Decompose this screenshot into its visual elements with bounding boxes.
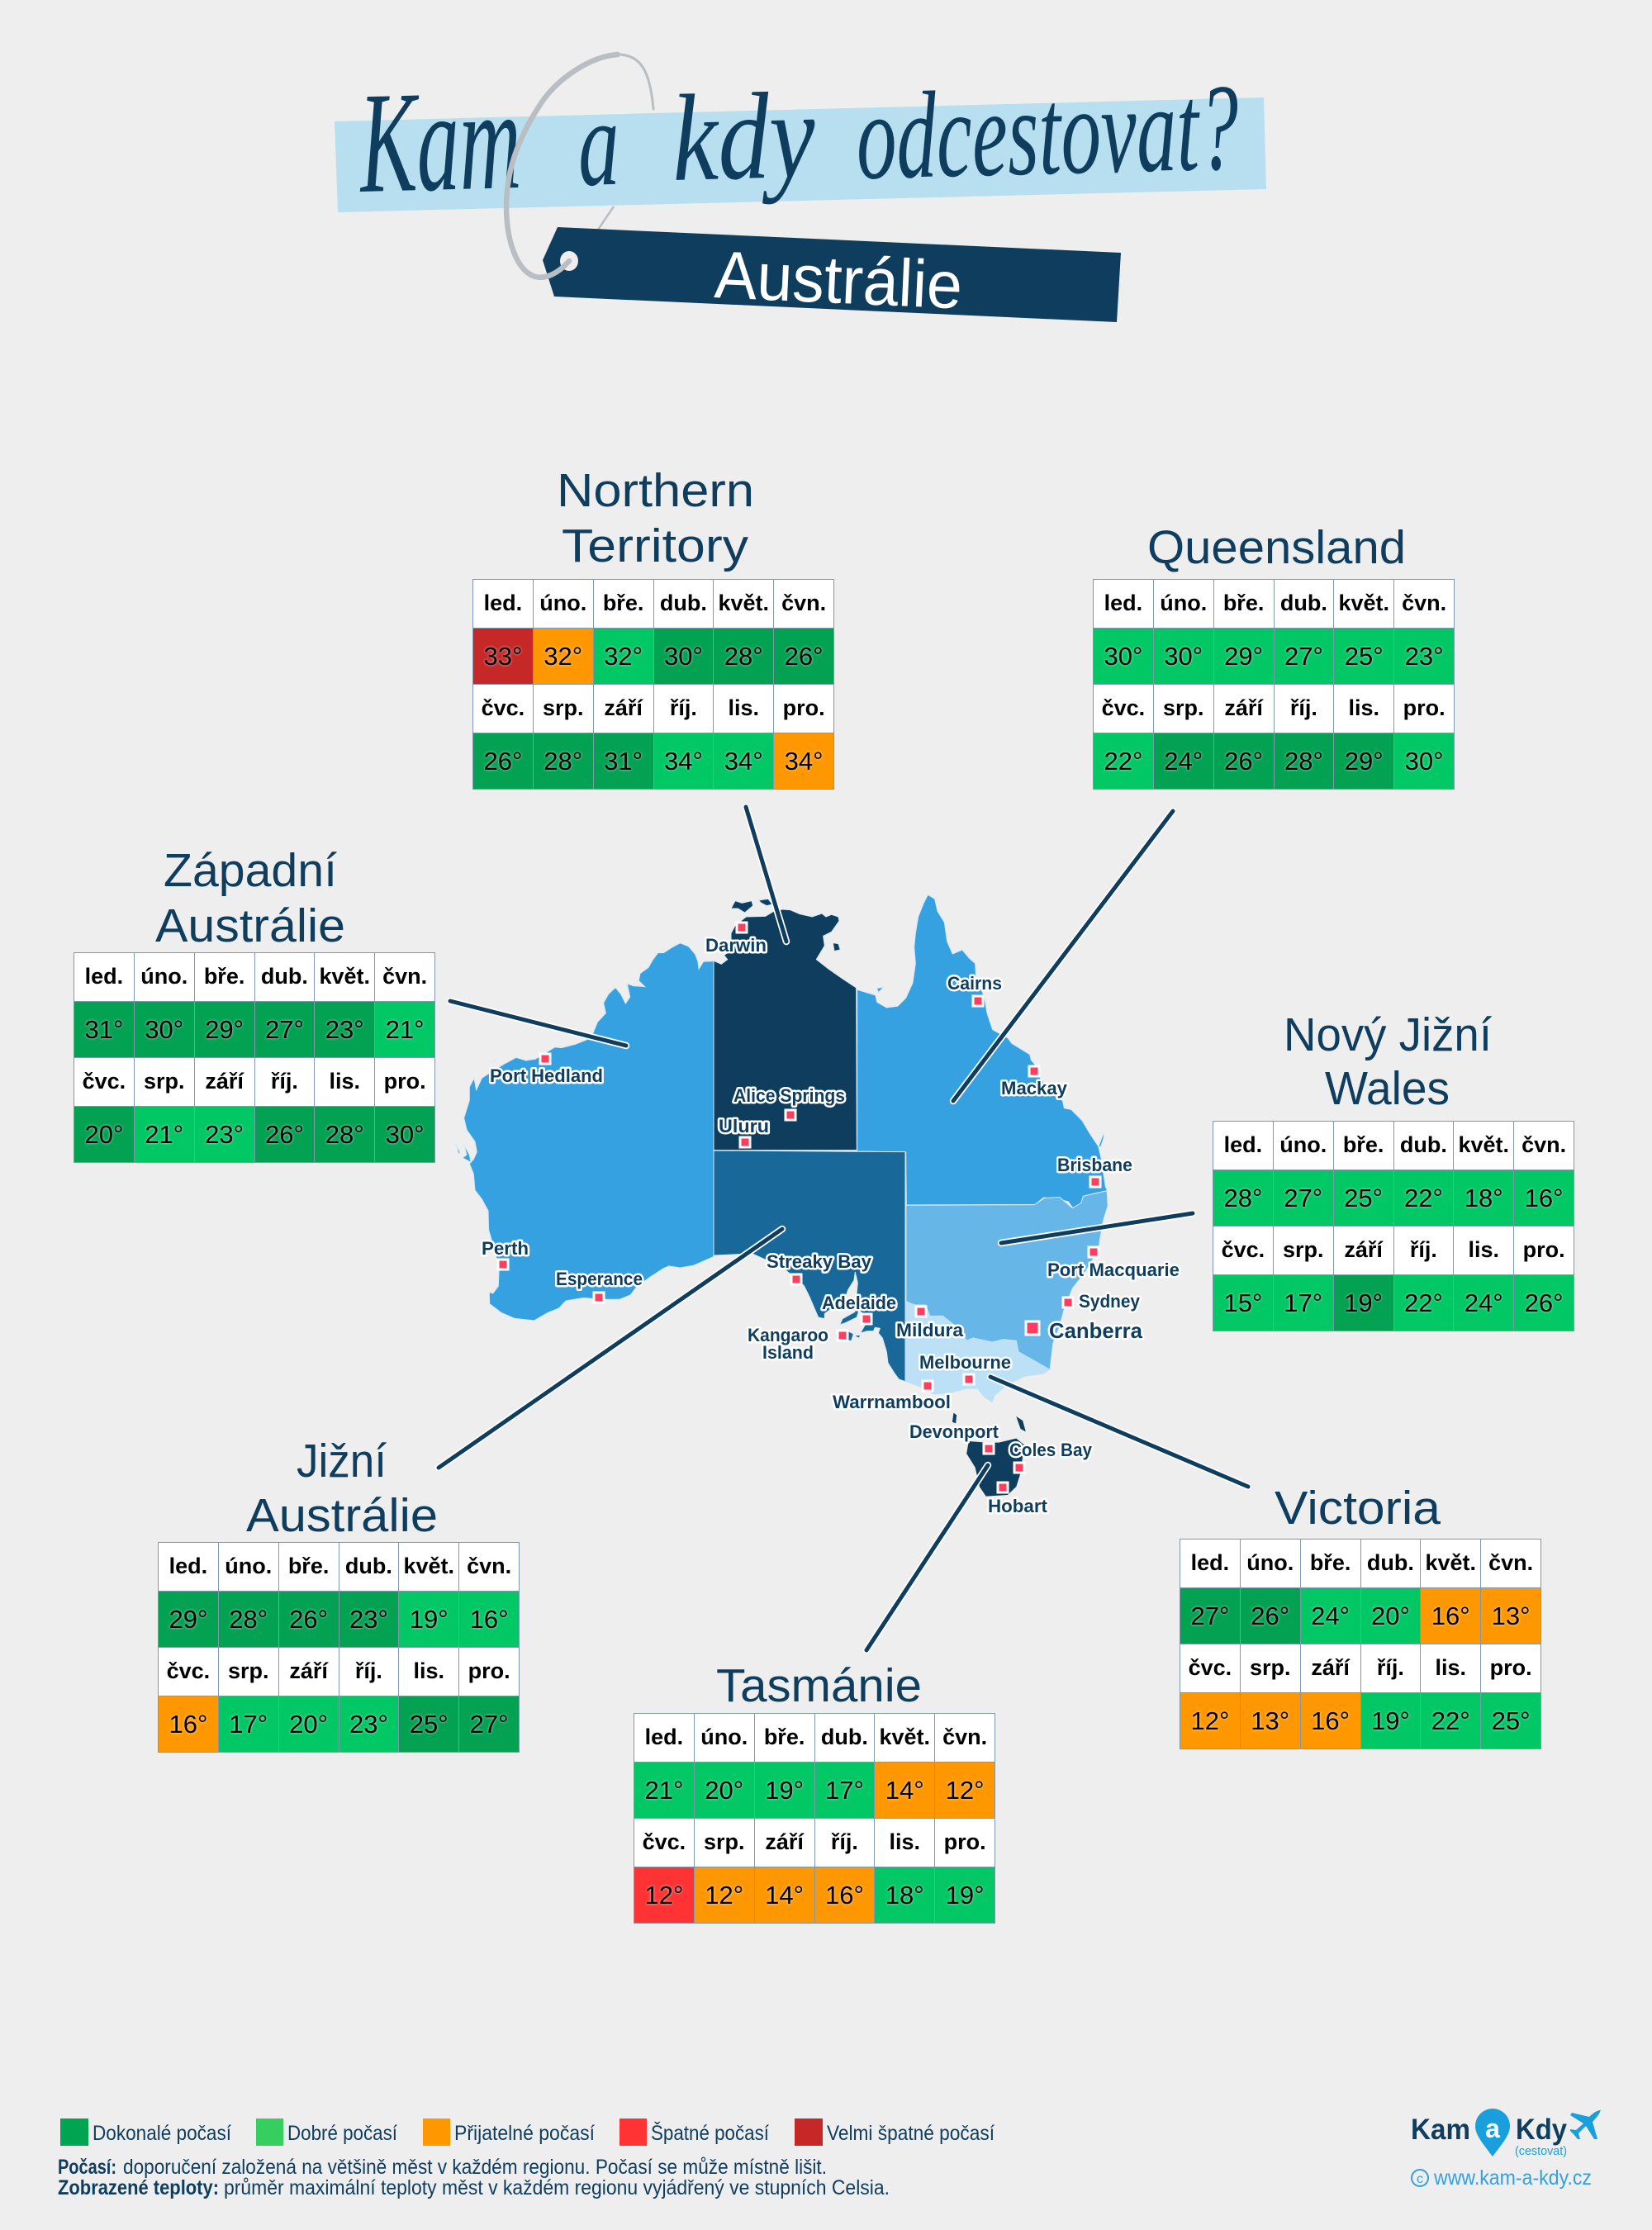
table: Jižní Austrálie: 25° [410,1710,449,1738]
city: Alice Springs [733,1085,845,1120]
table: Northern Territory [472,579,834,790]
table: Nový Jižní Wales: 17° [1284,1288,1322,1317]
table: Northern Territory: 32° [604,641,643,671]
table: Northern Territory: 26° [785,641,824,671]
table: Jižní Austrálie: 20° [289,1710,328,1738]
table: Západní Austrálie: čvn. [382,963,427,988]
tag string back [598,206,614,230]
note: temperatures: Zobrazené teploty: [58,2176,219,2199]
city: Coles Bay: Coles Bay [1009,1440,1093,1460]
legend: bad weather: Špatné počasí [651,2121,769,2145]
table: Tasmánie: 17° [825,1776,864,1804]
city: Hobart [988,1483,1048,1516]
title banner [335,97,1266,212]
table: Jižní Austrálie: čvc. [167,1658,210,1683]
heading: Nový Jižní Wales: Nový Jižní [1284,1008,1492,1061]
heading: Northern Territory: Territory [562,520,749,572]
region: Northern Territory [714,899,857,1151]
tag string loop [506,55,653,278]
table: Západní Austrálie: čvc. [83,1069,126,1094]
table: Nový Jižní Wales: 28° [1223,1183,1262,1212]
table: Jižní Austrálie: 23° [349,1604,388,1634]
table: Nový Jižní Wales: úno. [1279,1132,1327,1156]
table: Nový Jižní Wales: 18° [1464,1183,1503,1212]
website link: www.kam-a-kdy.cz [1433,2166,1592,2190]
table: Victoria: led. [1191,1549,1229,1574]
legend: bad weather [620,2118,769,2146]
table: Northern Territory: pro. [783,695,825,720]
table: Queensland: 30° [1405,747,1444,775]
icon: plane [1570,2110,1601,2139]
table: Victoria [1180,1539,1541,1749]
table: Northern Territory: čvc. [482,695,525,720]
subtitle: Austrálie [713,238,964,324]
table: Západní Austrálie: 29° [205,1014,244,1044]
table: Jižní Austrálie: 27° [470,1710,509,1738]
city: Streaky Bay [767,1251,872,1284]
table: Tasmánie: 14° [885,1776,924,1804]
table: Queensland: čvn. [1402,590,1446,614]
city: Devonport: Devonport [909,1421,999,1442]
subtitle tag [543,227,1121,322]
region: Tasmania [952,1413,1026,1497]
table: Jižní Austrálie: říj. [355,1658,382,1683]
table: Jižní Austrálie: 16° [470,1604,509,1634]
table: Queensland: 23° [1405,641,1444,671]
map of Australia [456,894,1108,1497]
table: Queensland: květ. [1338,590,1389,614]
table: Queensland: 28° [1284,747,1323,775]
table: Západní Austrálie: 30° [386,1120,425,1148]
table: Západní Austrálie: 20° [84,1120,123,1148]
table: Tasmánie: 19° [765,1776,804,1804]
table: Jižní Austrálie: srp. [228,1658,269,1683]
city: Streaky Bay: Streaky Bay [767,1251,872,1272]
table: Západní Austrálie: 31° [84,1014,123,1044]
city: Warrnambool: Warrnambool [833,1392,951,1412]
table: Victoria: 25° [1492,1706,1531,1734]
city: Devonport [909,1421,999,1454]
table: Queensland: září [1224,695,1263,720]
title: Kam [356,59,523,223]
table: Tasmánie: úno. [700,1725,748,1749]
table: Northern Territory: květ. [718,590,769,614]
table: Západní Austrálie: srp. [144,1069,185,1094]
table: Jižní Austrálie: led. [169,1553,207,1578]
city: Port Hedland [490,1054,603,1086]
table: Tasmánie: dub. [821,1725,868,1749]
table: Queensland [1093,579,1455,790]
logo [1411,2109,1601,2158]
table: Queensland: lis. [1348,695,1379,720]
table: Northern Territory: lis. [728,695,759,720]
note: weather: Počasí: [58,2156,116,2179]
table: Victoria: pro. [1490,1655,1532,1680]
table: Northern Territory: led. [484,590,522,614]
table: Tasmánie: 12° [644,1880,683,1910]
legend: perfect weather [60,2118,231,2146]
table: Victoria: 24° [1311,1601,1350,1630]
table: Tasmánie: bře. [764,1725,805,1749]
table: Victoria: 22° [1431,1706,1470,1734]
website link: c [1417,2172,1423,2186]
table: Northern Territory: 26° [483,747,522,775]
table: Západní Austrálie: pro. [384,1069,426,1094]
table: Northern Territory: úno. [539,590,586,614]
table: Queensland: pro. [1403,695,1446,720]
city: Mildura [896,1307,964,1340]
table: Nový Jižní Wales: pro. [1523,1237,1565,1262]
table: Queensland: 30° [1164,641,1203,671]
table: Nový Jižní Wales: 16° [1525,1183,1564,1212]
city: Sydney: Sydney [1079,1291,1141,1312]
table: Tasmánie: 21° [644,1776,683,1804]
table: Západní Austrálie: lis. [329,1069,360,1094]
table: Jižní Austrálie: pro. [468,1658,510,1683]
leader line: Queensland [953,811,1173,1101]
table: Queensland: 27° [1284,641,1323,671]
table: Queensland: 25° [1345,641,1384,671]
table: Tasmánie: říj. [831,1829,858,1853]
table: Tasmánie: září [765,1829,804,1853]
table: Západní Austrálie: 21° [386,1014,425,1044]
table: Tasmánie: květ. [879,1725,930,1749]
table: Northern Territory: 34° [724,747,763,775]
icon: location pin [1475,2109,1510,2156]
table: Victoria: 19° [1371,1706,1410,1734]
city: Coles Bay [1009,1440,1093,1473]
city: Cairns: Cairns [947,973,1002,994]
city: Darwin [705,923,767,956]
table: Northern Territory: 28° [544,747,582,775]
table: Jižní Austrálie: lis. [413,1658,444,1683]
city: Mackay: Mackay [1001,1078,1068,1098]
table: Západní Austrálie: bře. [204,963,244,988]
table: Nový Jižní Wales [1213,1121,1574,1331]
table: Queensland: 29° [1224,641,1263,671]
city: Adelaide: Adelaide [822,1293,896,1313]
table: Tasmánie: led. [645,1725,683,1749]
table: Nový Jižní Wales: 27° [1284,1183,1322,1212]
leader line: South Australia [439,1229,782,1468]
table: Nový Jižní Wales: čvn. [1521,1132,1566,1156]
city: Alice Springs: Alice Springs [733,1085,845,1106]
legend: good weather [256,2118,397,2146]
table: Západní Austrálie: led. [85,963,123,988]
logo: a [1485,2114,1500,2143]
table: Nový Jižní Wales: 22° [1404,1288,1443,1317]
table: Victoria: čvn. [1488,1549,1533,1574]
table: Queensland: led. [1104,590,1142,614]
table: Northern Territory: 28° [724,641,763,671]
table: Nový Jižní Wales: září [1344,1237,1383,1262]
table: Tasmánie: čvn. [942,1725,987,1749]
city: Brisbane [1057,1155,1132,1187]
title [356,59,1241,223]
title: a [577,74,621,212]
city: Adelaide [822,1293,896,1324]
city: Esperance [556,1269,643,1302]
legend: good weather: Dobré počasí [287,2122,397,2145]
region: Victoria [905,1302,1050,1402]
leader line: Northern Territory [746,807,786,942]
table: Nový Jižní Wales: dub. [1400,1132,1447,1156]
table: Northern Territory: dub. [660,590,707,614]
table: Northern Territory: čvn. [781,590,826,614]
heading: Northern Territory: Northern [557,464,754,517]
table: Victoria: lis. [1435,1655,1466,1680]
leader line: Western Australia [450,1001,626,1046]
table: Tasmánie: lis. [889,1829,920,1853]
legend: acceptable weather: Přijatelné počasí [454,2122,595,2145]
legend: acceptable weather [423,2118,595,2146]
table: Nový Jižní Wales: 15° [1223,1288,1262,1317]
table: Západní Austrálie: květ. [319,963,370,988]
title: kdy [671,67,817,207]
region: South Australia [714,1151,905,1382]
table: Queensland: dub. [1280,590,1327,614]
legend: very bad weather: Velmi špatné počasí [827,2122,995,2145]
legend: perfect weather: Dokonalé počasí [93,2122,231,2145]
table: Jižní Austrálie: 29° [169,1604,207,1634]
city: Warrnambool [833,1381,951,1412]
table: Jižní Austrálie: úno. [225,1553,272,1578]
table: Západní Austrálie: 26° [265,1120,304,1148]
table: Tasmánie: 16° [825,1880,864,1910]
table: Nový Jižní Wales: led. [1224,1132,1262,1156]
table: Queensland: říj. [1290,695,1317,720]
table: Nový Jižní Wales: čvc. [1222,1237,1265,1262]
heading: Jižní Austrálie [246,1435,438,1542]
logo: Kam [1411,2114,1470,2146]
table: Northern Territory: 33° [483,641,522,671]
table: Nový Jižní Wales: srp. [1283,1237,1323,1262]
leader line: Tasmania [866,1465,988,1650]
city: Port Macquarie [1047,1247,1180,1280]
table: Nový Jižní Wales: 25° [1344,1183,1383,1212]
table: Jižní Austrálie: září [289,1658,328,1683]
table: Západní Austrálie [74,952,435,1163]
table: Queensland: 24° [1164,747,1203,775]
table: Northern Territory: 34° [664,747,703,775]
note: temperatures: průměr maximální teploty měst v každém regionu vyjádřený ve stupních Celsia. [224,2176,890,2199]
leader line: New South Wales [1001,1213,1193,1243]
table: Jižní Austrálie [158,1542,520,1753]
city: Brisbane: Brisbane [1057,1155,1132,1175]
table: Victoria: 16° [1431,1601,1470,1630]
heading: Queensland: Queensland [1147,521,1406,574]
table: Západní Austrálie: 23° [205,1120,244,1148]
table: Victoria: čvc. [1189,1655,1232,1680]
table: Victoria: říj. [1377,1655,1404,1680]
city: Perth: Perth [482,1238,529,1259]
city: Melbourne: Melbourne [919,1352,1011,1373]
heading: Nový Jižní Wales [1284,1008,1492,1115]
city: Kangaroo Island: Kangaroo [748,1325,828,1345]
title: odcestovat? [855,59,1241,206]
table: Západní Austrálie: úno. [140,963,188,988]
city: Kangaroo Island: Island [762,1342,814,1363]
table: Tasmánie: 20° [705,1776,743,1804]
city: Port Hedland: Port Hedland [490,1065,603,1086]
table: Northern Territory: 32° [544,641,582,671]
table: Victoria: 26° [1251,1601,1289,1630]
city: Hobart: Hobart [988,1496,1048,1516]
heading: Northern Territory [557,464,754,572]
table: Northern Territory: říj. [670,695,697,720]
table: Jižní Austrálie: bře. [288,1553,329,1578]
heading: Západní Austrálie: Austrálie [155,899,345,952]
tag hole [560,251,578,271]
table: Victoria: 13° [1492,1601,1531,1630]
table: Tasmánie: 14° [765,1880,804,1910]
table: Tasmánie: 19° [946,1880,985,1910]
table: Tasmánie: pro. [944,1829,986,1853]
table: Jižní Austrálie: dub. [345,1553,392,1578]
heading: Západní Austrálie [155,844,345,952]
table: Victoria: dub. [1367,1549,1414,1574]
table: Nový Jižní Wales: 19° [1344,1288,1383,1317]
table: Nový Jižní Wales: květ. [1458,1132,1509,1156]
table: Jižní Austrálie: 19° [410,1604,449,1634]
table: Tasmánie: čvc. [643,1829,686,1853]
table: Victoria: 16° [1311,1706,1350,1734]
region: New South Wales [906,1191,1108,1369]
table: Nový Jižní Wales: bře. [1343,1132,1384,1156]
table: Nový Jižní Wales: 26° [1525,1288,1564,1317]
table: Jižní Austrálie: 26° [289,1604,328,1634]
table: Queensland: 22° [1104,747,1142,775]
table: Západní Austrálie: dub. [261,963,308,988]
table: Queensland: 26° [1224,747,1263,775]
city: Kangaroo Island [748,1325,847,1363]
city: Perth [482,1238,529,1269]
table: Northern Territory: bře. [603,590,643,614]
city: Mackay [1001,1066,1068,1098]
heading: Západní Austrálie: Západní [164,844,337,897]
table: Nový Jižní Wales: 24° [1464,1288,1503,1317]
table: Jižní Austrálie: květ. [403,1553,454,1578]
city: Darwin: Darwin [705,935,767,956]
logo: (cestovat) [1515,2144,1567,2158]
heading: Victoria: Victoria [1275,1482,1441,1535]
city: Cairns [947,973,1002,1006]
table: Jižní Austrálie: 28° [229,1604,268,1634]
table: Victoria: září [1311,1655,1350,1680]
table: Tasmánie: 12° [705,1880,743,1910]
logo: Kdy [1516,2114,1567,2146]
heading: Nový Jižní Wales: Wales [1325,1062,1450,1115]
table: Nový Jižní Wales: říj. [1410,1237,1437,1262]
table: Západní Austrálie: 21° [145,1120,183,1148]
city: Melbourne [919,1352,1011,1384]
table: Northern Territory: září [604,695,643,720]
table: Nový Jižní Wales: lis. [1468,1237,1499,1262]
table: Northern Territory: srp. [543,695,583,720]
region: Western Australia [456,943,714,1321]
table: Victoria: 20° [1371,1601,1410,1630]
table: Victoria: úno. [1246,1549,1294,1574]
table: Northern Territory: 31° [604,747,643,775]
heading: Jižní Austrálie: Austrálie [246,1489,438,1542]
table: Queensland: čvc. [1102,695,1145,720]
heading: Jižní Austrálie: Jižní [297,1435,387,1487]
table: Victoria: 13° [1251,1706,1289,1734]
city: Uluru [719,1116,769,1147]
table: Tasmánie [634,1713,995,1924]
table: Západní Austrálie: září [205,1069,244,1094]
table: Západní Austrálie: 27° [265,1014,304,1044]
table: Jižní Austrálie: 17° [229,1710,268,1738]
table: Západní Austrálie: říj. [271,1069,298,1094]
leader line: Victoria [990,1377,1248,1487]
table: Západní Austrálie: 28° [325,1120,364,1148]
table: Queensland: úno. [1160,590,1207,614]
table: Victoria: květ. [1425,1549,1476,1574]
table: Nový Jižní Wales: 22° [1404,1183,1443,1212]
table: Jižní Austrálie: 16° [169,1710,207,1738]
table: Northern Territory: 34° [785,747,824,775]
city: Uluru: Uluru [719,1116,769,1136]
table: Victoria: 27° [1190,1601,1229,1630]
table: Tasmánie: 18° [885,1880,924,1910]
table: Tasmánie: 12° [946,1776,985,1804]
table: Jižní Austrálie: čvn. [467,1553,511,1578]
note: weather: doporučení založená na většině měst v každém regionu. Počasí se může místně lišit. [123,2156,827,2179]
table: Jižní Austrálie: 23° [349,1710,388,1738]
table: Queensland: 30° [1104,641,1142,671]
table: Victoria: 12° [1190,1706,1229,1734]
table: Queensland: 29° [1345,747,1384,775]
table: Victoria: bře. [1310,1549,1351,1574]
table: Victoria: srp. [1250,1655,1290,1680]
legend [60,2118,995,2146]
table: Queensland: bře. [1223,590,1264,614]
city: Mildura: Mildura [896,1320,964,1340]
city: Port Macquarie: Port Macquarie [1047,1260,1180,1280]
table: Tasmánie: srp. [704,1829,745,1853]
table: Queensland: srp. [1163,695,1204,720]
city: Canberra: Canberra [1049,1318,1143,1343]
city: Esperance: Esperance [556,1269,643,1289]
heading: Tasmánie: Tasmánie [716,1659,922,1712]
region: Queensland [857,894,1108,1208]
table: Northern Territory: 30° [664,641,703,671]
table: Západní Austrálie: 30° [145,1014,183,1044]
table: Západní Austrálie: 23° [325,1014,364,1044]
legend: very bad weather [795,2118,995,2146]
